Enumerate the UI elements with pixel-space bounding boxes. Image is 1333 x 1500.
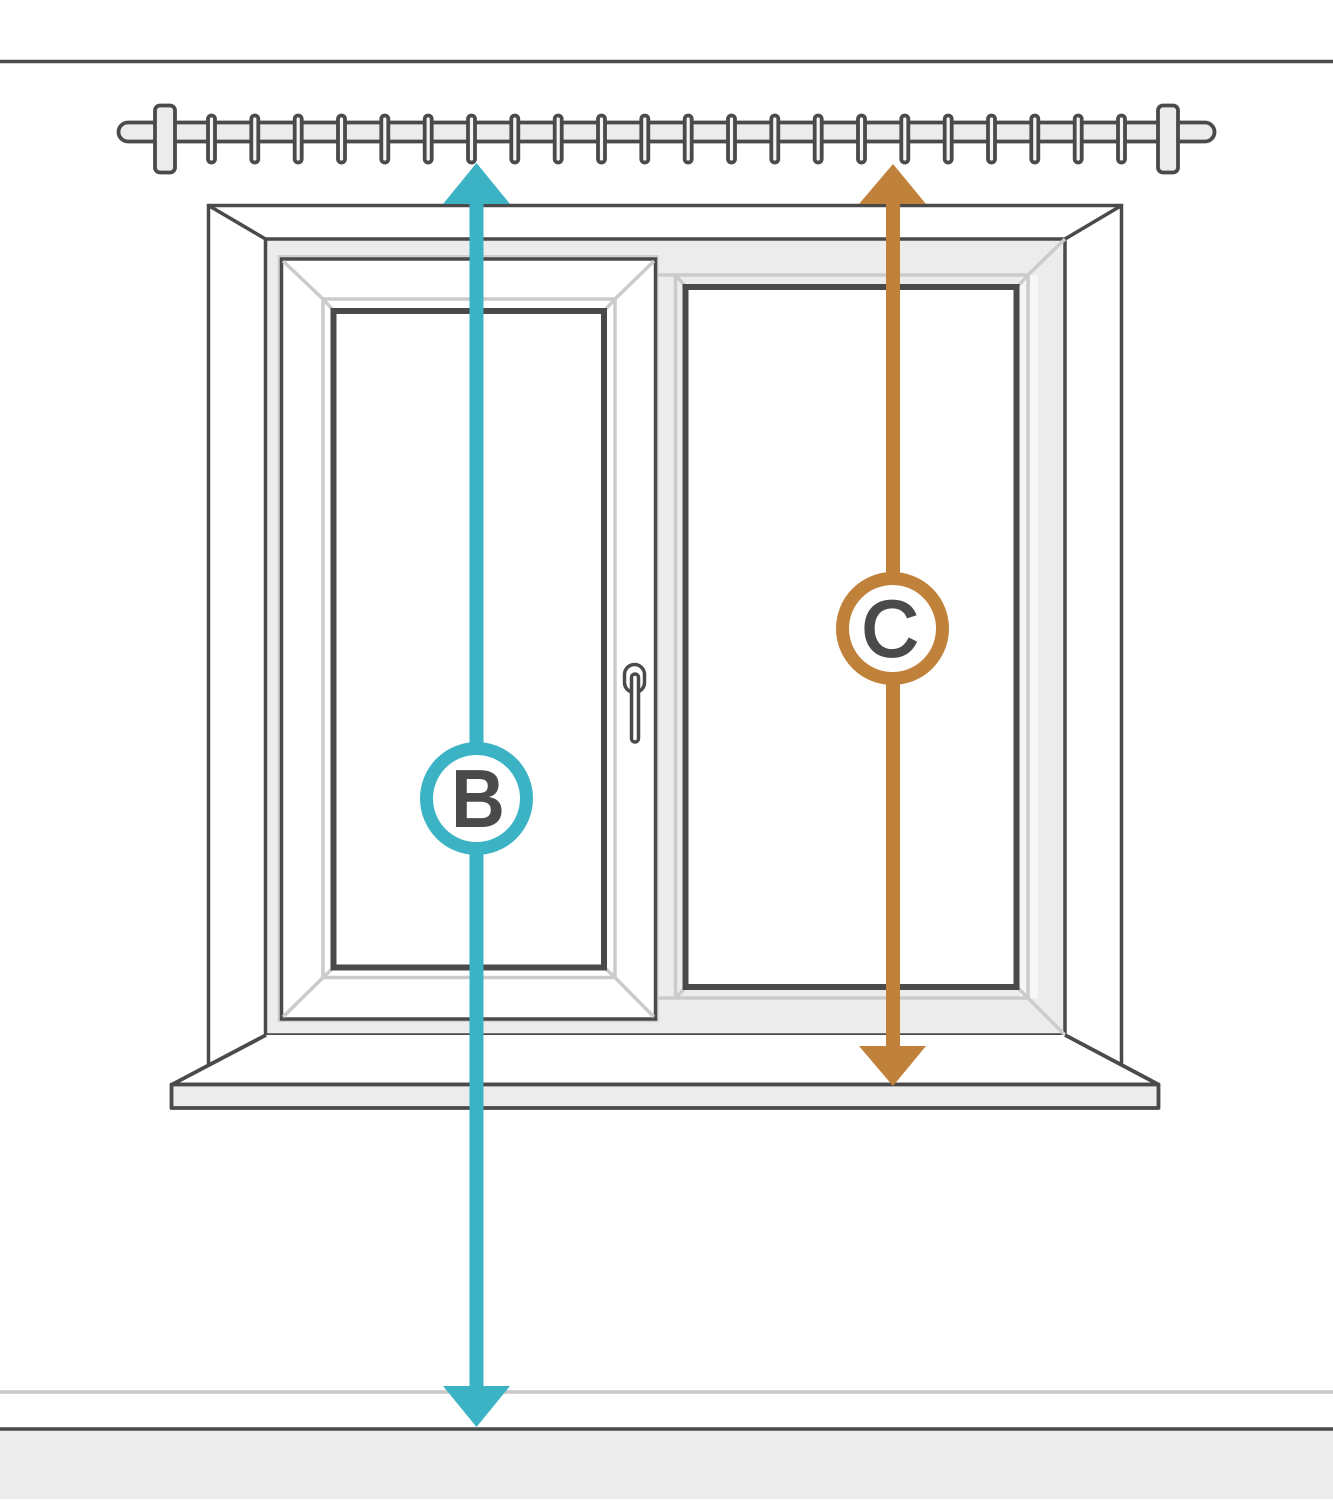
right fixed pane: [658, 239, 1065, 1035]
floor and skirting: [0, 1392, 1333, 1499]
curtain rings: [208, 116, 1125, 162]
label C: C: [862, 584, 918, 672]
label B: [426, 748, 526, 848]
left opening sash: [278, 255, 658, 1022]
measurement arrow C: [842, 164, 942, 1086]
left finial: [155, 106, 175, 172]
right glass: [686, 287, 1016, 987]
label C: [842, 578, 942, 678]
measurement arrow B: [426, 163, 526, 1427]
right finial: [1158, 106, 1178, 172]
ceiling line: [0, 60, 1333, 63]
label B: B: [451, 752, 505, 845]
rod bar: [118, 122, 1214, 142]
left glass: [334, 311, 604, 968]
window handle: [624, 664, 644, 742]
window sill: [172, 1035, 1158, 1108]
window surround: [208, 206, 1122, 1066]
curtain rod: [118, 106, 1214, 172]
